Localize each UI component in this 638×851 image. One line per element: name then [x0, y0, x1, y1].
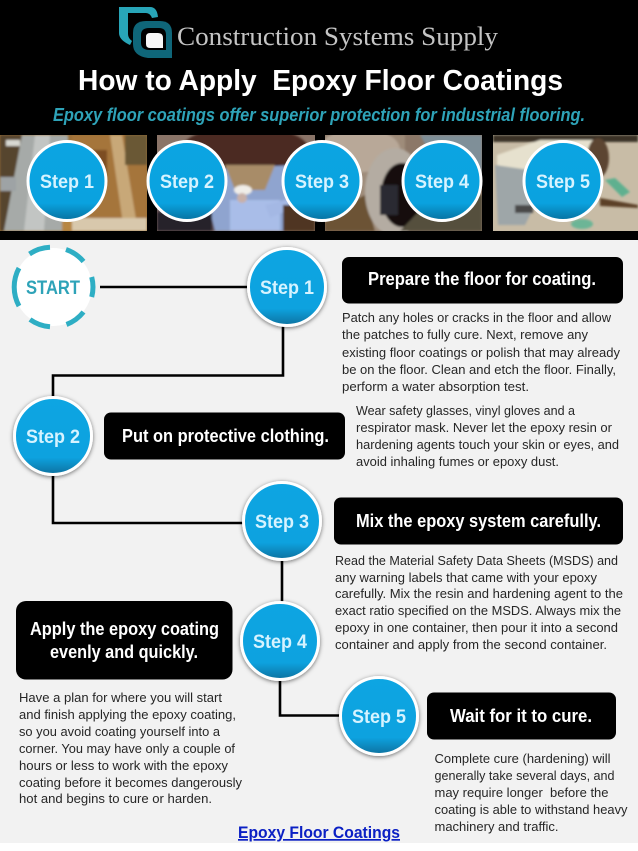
- start marker: START: [26, 278, 80, 299]
- text: step 3 description: [335, 553, 623, 652]
- heading: wait for cure: [427, 692, 616, 740]
- flow connector lines: [53, 287, 342, 716]
- badge: step 5: [524, 142, 602, 220]
- heading: mix the epoxy: [334, 498, 623, 544]
- text: step 4 description: [19, 690, 242, 806]
- text: step 3 description: carefully. Mix the resin and hardening agent to the: [335, 586, 623, 601]
- top step badges: [28, 142, 602, 220]
- heading: wait for cure: Wait for it to cure.: [450, 706, 592, 726]
- subtitle: Epoxy floor coatings offer superior protection for industrial flooring.: [53, 105, 585, 125]
- heading: protective clothing: Put on protective clothing.: [122, 426, 329, 446]
- text: step 2 description: Wear safety glasses, vinyl gloves and a: [356, 403, 576, 418]
- text: step 1 description: existing floor coatings or polish that may already: [342, 345, 620, 360]
- flow step 3: [244, 482, 320, 560]
- text: step 4 description: so you avoid coating yourself into a: [19, 724, 221, 739]
- flow step 2: Step 2: [26, 427, 80, 448]
- text: step 5 description: Complete cure (hardening) will: [434, 751, 611, 766]
- flow step 3: Step 3: [255, 512, 309, 533]
- badge: step 4: [403, 142, 481, 220]
- text: step 3 description: container and apply from the second container.: [335, 637, 607, 652]
- text: step 4 description: hot and begins to cure or harden.: [19, 791, 212, 806]
- badge: step 3: Step 3: [295, 172, 349, 193]
- text: step 1 description: be on the floor. Clean and etch the floor. Finally,: [342, 362, 616, 377]
- badge: step 1: Step 1: [40, 172, 94, 193]
- text: step 5 description: generally take several days, and: [434, 768, 614, 783]
- flow step 5: Step 5: [352, 707, 406, 728]
- text: step 3 description: any warning labels that came with your epoxy: [335, 570, 597, 585]
- badge: step 2: Step 2: [160, 172, 214, 193]
- flow step 1: [248, 248, 326, 326]
- logo wordmark: Construction Systems Supply: [177, 22, 498, 51]
- flow step 1: Step 1: [260, 278, 314, 299]
- heading: prepare the floor: [342, 257, 623, 304]
- flow step 2: [14, 398, 92, 474]
- photo: corroded floor and pipe: [0, 135, 147, 231]
- text: step 5 description: coating is able to withstand heavy: [434, 802, 628, 817]
- text: step 5 description: machinery and traffic.: [434, 819, 558, 834]
- text: step 2 description: respirator mask. Never let the epoxy resin or: [356, 420, 613, 435]
- text: step 2 description: hardening agents touch your skin or eyes, and: [356, 437, 619, 452]
- photo: worker in protective suit: [157, 126, 315, 231]
- text: step 1 description: the patches to fully cure. Next, remove any: [342, 327, 588, 342]
- text: step 5 description: may require longer before the: [434, 785, 608, 800]
- text: step 3 description: Read the Material Safety Data Sheets (MSDS) and: [335, 553, 618, 568]
- link: epoxy floor coatings: Epoxy Floor Coatings: [238, 823, 400, 842]
- text: step 3 description: exact ratio specified on the MSDS. Always mix the: [335, 603, 621, 618]
- text: step 3 description: epoxy in one container, then pour it into a second: [335, 620, 618, 635]
- badge: step 4: Step 4: [415, 172, 469, 193]
- text: step 4 description: hours or less to work with the epoxy: [19, 758, 228, 773]
- flow step 5: [340, 678, 418, 754]
- text: step 1 description: [342, 310, 620, 394]
- start marker: [14, 247, 93, 327]
- text: step 4 description: coating before it becomes dangerously: [19, 775, 242, 790]
- badge: step 3: [283, 142, 361, 220]
- heading: apply the coating: [16, 601, 232, 680]
- flow step 4: [242, 602, 318, 680]
- heading: prepare the floor: Prepare the floor for coating.: [368, 269, 596, 289]
- heading: apply the coating: evenly and quickly.: [50, 642, 198, 662]
- badge: step 1: [28, 142, 106, 220]
- text: step 2 description: [356, 403, 619, 469]
- heading: apply the coating: Apply the epoxy coating: [30, 619, 219, 639]
- photo: worker applying coating: [493, 135, 638, 231]
- text: step 5 description: [434, 751, 628, 834]
- text: step 1 description: Patch any holes or cracks in the floor and allow: [342, 310, 612, 325]
- header band: [0, 0, 638, 240]
- text: step 4 description: Have a plan for where you will start: [19, 690, 222, 705]
- text: step 2 description: avoid inhaling fumes or epoxy dust.: [356, 454, 559, 469]
- heading: protective clothing: [104, 412, 345, 460]
- photo strip: [0, 135, 638, 231]
- badge: step 2: [148, 142, 226, 220]
- heading: mix the epoxy: Mix the epoxy system carefully.: [356, 511, 601, 531]
- photo: tunnel interior: [325, 135, 482, 231]
- title: How to Apply Epoxy Floor Coatings: [78, 65, 563, 97]
- text: step 4 description: corner. You may have only a couple of: [19, 741, 235, 756]
- text: step 4 description: and finish applying the epoxy coating,: [19, 707, 236, 722]
- text: step 1 description: perform a water absorption test.: [342, 379, 529, 394]
- badge: step 5: Step 5: [536, 172, 590, 193]
- flow step 4: Step 4: [253, 632, 307, 653]
- logo icon: [119, 7, 172, 58]
